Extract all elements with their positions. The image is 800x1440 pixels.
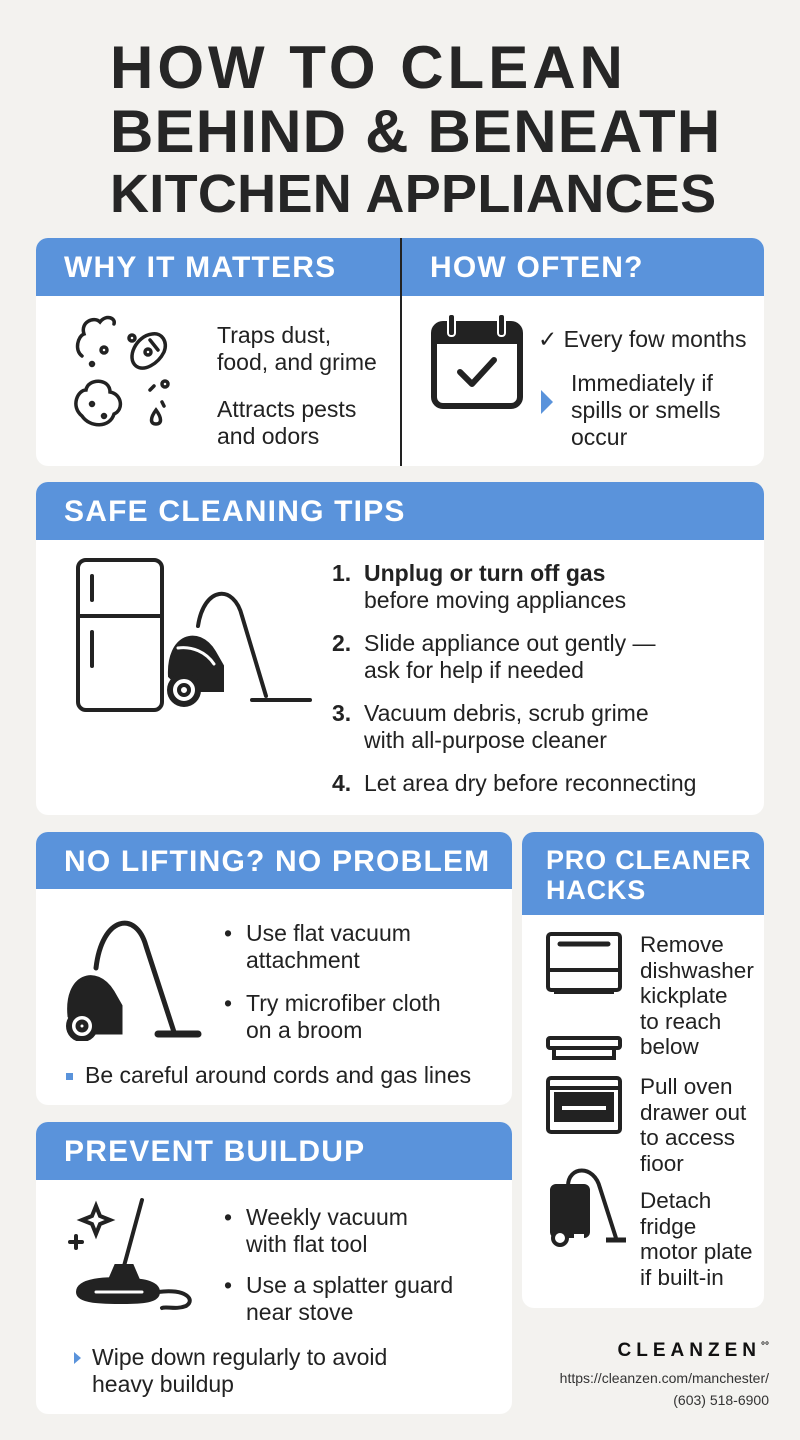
heading: why it matters: WHY IT MATTERS (64, 251, 336, 284)
panel: why it matters / how often: occur (571, 424, 627, 450)
text: oven hack: drawer out (640, 1100, 746, 1124)
text: numbered steps: 3. (332, 700, 351, 726)
panel: no lifting (36, 832, 512, 1105)
text: oven hack: fioor (640, 1150, 684, 1176)
icon: dirt and crumbs (74, 316, 170, 426)
text: oven hack: to access (640, 1125, 735, 1150)
icon: oven drawer (546, 1076, 622, 1134)
text: bullets: Use flat vacuum (246, 920, 411, 946)
text: why it matters (217, 322, 377, 375)
footer: brand and contact (560, 1340, 769, 1408)
text: fridge hack: if built-in (640, 1264, 724, 1290)
text: fridge hack (640, 1188, 753, 1290)
text: fridge hack: fridge (640, 1214, 696, 1238)
title: BEHIND & BENEATH (110, 98, 721, 165)
text: oven hack (640, 1074, 746, 1176)
text: why it matters: food, and grime (217, 349, 377, 375)
panel: safe cleaning tips (36, 482, 764, 815)
icon: fridge and vacuum (76, 558, 312, 712)
text: oven hack: Pull oven (640, 1074, 733, 1099)
text: numbered steps: with all-purpose cleaner (364, 727, 607, 753)
heading (36, 832, 512, 889)
panel: no lifting: Try microfiber cloth (246, 990, 441, 1016)
heading: NO LIFTING? NO PROBLEM (64, 845, 490, 878)
panel: why it matters / how often: spills or smells (571, 397, 721, 423)
text: dishwasher hack (640, 932, 754, 1059)
text: bullets: Weekly vacuum (246, 1204, 408, 1230)
text: bullets: attachment (246, 947, 360, 973)
heading (522, 832, 764, 915)
text: numbered steps: 2. (332, 630, 351, 656)
panel: prevent buildup: Wipe down regularly to avoid (92, 1344, 387, 1370)
heading (36, 482, 764, 540)
heading: how often: HOW OFTEN? (430, 251, 644, 284)
text: dishwasher hack: kickplate (640, 983, 728, 1008)
panel: prevent buildup: near stove (246, 1299, 353, 1325)
panel: why it matters / how often: and odors (217, 423, 319, 449)
icon: dishwasher (546, 932, 622, 1060)
panel: pro cleaner hacks (522, 832, 764, 1308)
panel: prevent buildup (36, 1122, 512, 1414)
panel: why it matters / how often: Immediately if (571, 370, 713, 396)
text: numbered steps: Slide appliance out gently — (364, 630, 656, 656)
footer: brand and contact: CLEANZEN°° (618, 1340, 769, 1361)
text: numbered steps: Let area dry before reconnecting (364, 770, 696, 796)
panel: prevent buildup: Use a splatter guard (246, 1272, 453, 1298)
text: why it matters: Traps dust, (217, 322, 331, 348)
text: how often: ✓ Every fow months (538, 326, 746, 352)
text: bullets (246, 920, 411, 974)
text: numbered steps (332, 560, 696, 796)
text: numbered steps: Vacuum debris, scrub grime (364, 700, 649, 726)
footer: brand and contact: (603) 518-6900 (673, 1392, 769, 1408)
text: dishwasher hack: dishwasher (640, 958, 754, 982)
text: numbered steps: Unplug or turn off gas (364, 560, 605, 586)
text: numbered steps: ask for help if needed (364, 657, 584, 683)
text: bullets: with flat tool (246, 1231, 367, 1257)
text: dishwasher hack: to reach (640, 1008, 721, 1034)
heading: SAFE CLEANING TIPS (64, 495, 406, 528)
title: KITCHEN APPLIANCES (110, 164, 716, 224)
callout: wipe down (74, 1352, 81, 1364)
text: fridge hack: Detach (640, 1188, 711, 1213)
panel: no lifting: on a broom (246, 1017, 362, 1043)
heading: why it matters (36, 238, 764, 296)
text: numbered steps: 1. (332, 560, 351, 586)
icon: calendar (431, 315, 523, 409)
text: dishwasher hack: Remove (640, 932, 724, 957)
panel: why it matters / how often: Attracts pests (217, 396, 356, 422)
heading: HACKS (546, 875, 646, 905)
callout: caution: Be careful around cords and gas lines (85, 1062, 471, 1088)
text: fridge hack: motor plate (640, 1239, 753, 1264)
text: dishwasher hack: below (640, 1034, 699, 1059)
icon: vacuum (66, 920, 202, 1041)
icon: vacuum small (550, 1168, 626, 1247)
footer: brand and contact: https://cleanzen.com/manchester/ (560, 1370, 769, 1386)
heading: PREVENT BUILDUP (64, 1135, 365, 1168)
text: numbered steps: before moving appliances (364, 587, 626, 613)
heading (36, 1122, 512, 1180)
title (110, 34, 721, 224)
title: HOW TO CLEAN (110, 34, 627, 101)
panel: why it matters / how often (36, 238, 764, 466)
heading: PRO CLEANER (546, 845, 751, 875)
text: bullets (246, 1204, 408, 1258)
text: numbered steps: 4. (332, 770, 351, 796)
panel: prevent buildup: heavy buildup (92, 1371, 234, 1397)
icon: floor vacuum with sparkles (68, 1198, 192, 1310)
